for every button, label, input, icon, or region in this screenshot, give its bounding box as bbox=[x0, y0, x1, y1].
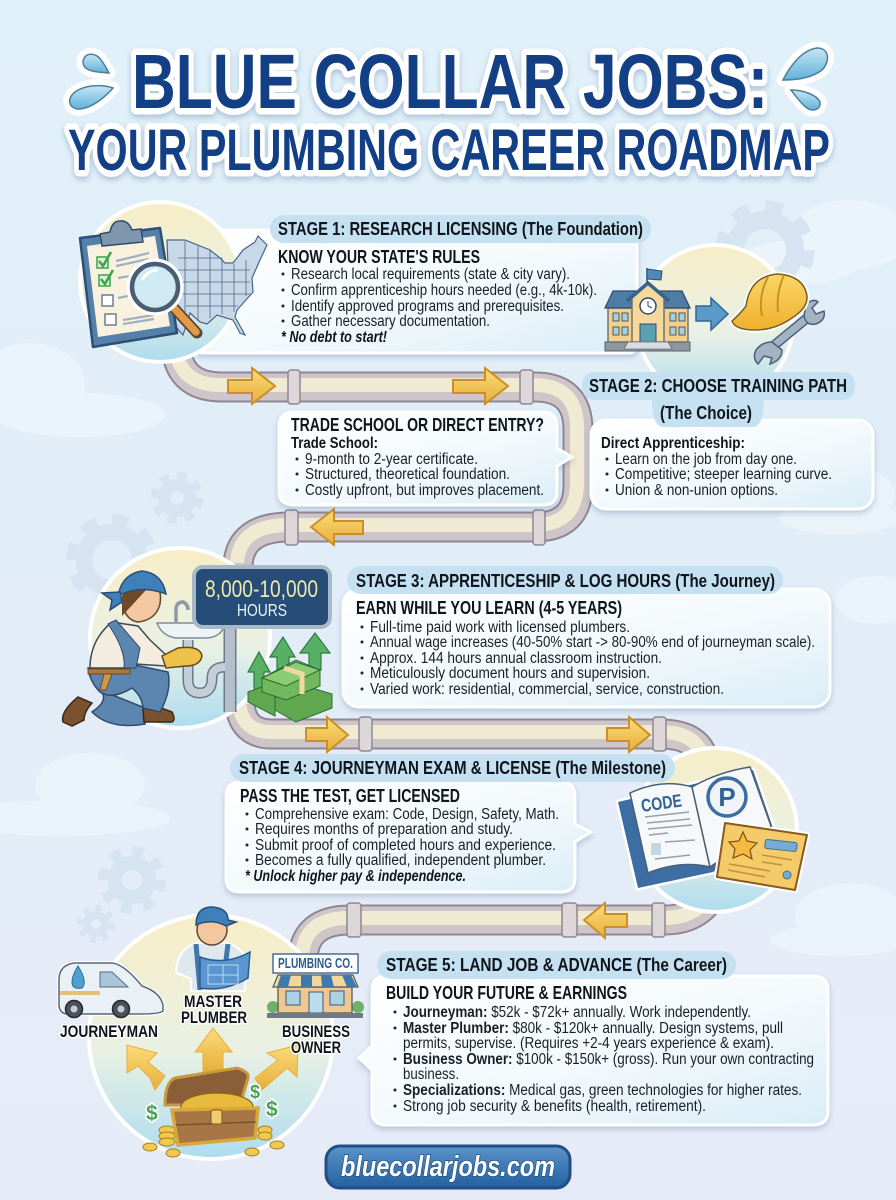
icon: van bbox=[59, 963, 163, 1018]
bubble: stage 4 bbox=[633, 748, 797, 912]
bullet list: Master Plumber: $80k - $120k+ annually. Design systems, pull bbox=[403, 1020, 783, 1037]
icon: treasure chest bbox=[143, 1068, 284, 1157]
stage 2 heading line 1: STAGE 2: CHOOSE TRAINING PATH bbox=[589, 376, 847, 396]
bullet list: Full-time paid work with licensed plumbers. bbox=[370, 619, 630, 636]
bubble: stage 5 bbox=[89, 915, 333, 1159]
label: master plumber: PLUMBER bbox=[181, 1008, 247, 1027]
card heading: KNOW YOUR STATE'S RULES bbox=[278, 247, 480, 267]
icon: sink and drain pipe bbox=[157, 602, 230, 712]
bullet list: Submit proof of completed hours and experience. bbox=[255, 837, 556, 854]
trade school subheading: Trade School: bbox=[291, 435, 378, 452]
icon: master plumber with blueprint bbox=[177, 907, 250, 990]
bullet list: Research local requirements (state & city vary). bbox=[291, 266, 570, 283]
bullet list: Business Owner: $100k - $150k+ (gross). Run your own contracting bbox=[403, 1051, 814, 1068]
card: pass the test bbox=[226, 782, 591, 892]
bubble: stage 2 bbox=[637, 245, 793, 401]
panel: stage 2 bbox=[279, 372, 873, 509]
card: direct apprenticeship bbox=[591, 420, 873, 509]
bullet list: Strong job security & benefits (health, retirement). bbox=[403, 1098, 706, 1115]
stage 5 pill bbox=[377, 951, 736, 979]
bullet list: Approx. 144 hours annual classroom instruction. bbox=[370, 650, 662, 667]
icon: code book bbox=[618, 767, 773, 888]
bullet list: permits, supervise. (Requires +2-4 years experience & exam). bbox=[403, 1035, 774, 1052]
card: earn while you learn bbox=[343, 589, 830, 707]
pipe fittings bbox=[347, 903, 665, 937]
label: business owner: OWNER bbox=[291, 1038, 341, 1057]
label: journeyman: JOURNEYMAN bbox=[60, 1022, 158, 1041]
trade school bullets: Structured, theoretical foundation. bbox=[305, 466, 510, 483]
label: master plumber bbox=[181, 992, 247, 1027]
icon: money and green arrows bbox=[248, 633, 332, 722]
icon: treasure chest: $ bbox=[250, 1082, 260, 1102]
bullet list: * Unlock higher pay & independence. bbox=[245, 868, 466, 885]
stage 4 pill bbox=[230, 754, 675, 782]
bullet list: business. bbox=[403, 1066, 459, 1083]
pipe fittings bbox=[285, 370, 545, 545]
card: build your future bbox=[359, 976, 828, 1125]
card heading: PASS THE TEST, GET LICENSED bbox=[240, 786, 460, 806]
stage 4 heading: STAGE 4: JOURNEYMAN EXAM & LICENSE (The Milestone) bbox=[239, 758, 666, 778]
stage 2 heading line 2: (The Choice) bbox=[660, 403, 752, 423]
arrow: pipe left 3 bbox=[311, 509, 363, 545]
bullet list: Annual wage increases (40-50% start -> 80-90% end of journeyman scale). bbox=[370, 634, 815, 651]
stage 5 heading: STAGE 5: LAND JOB & ADVANCE (The Career) bbox=[386, 955, 727, 975]
arrow: school to hard hat bbox=[696, 298, 728, 330]
trade school bullets bbox=[296, 451, 544, 499]
icon: code book: P bbox=[718, 782, 736, 812]
arrow: pipe left 6 bbox=[584, 903, 627, 938]
icon: US map bbox=[167, 236, 267, 335]
website url: bluecollarjobs.com bbox=[341, 1151, 555, 1183]
card: trade school bbox=[279, 412, 572, 505]
bullet list: Becomes a fully qualified, independent plumber. bbox=[255, 852, 546, 869]
card heading: EARN WHILE YOU LEARN (4-5 YEARS) bbox=[356, 598, 622, 618]
arrow: pipe right 2 bbox=[453, 368, 508, 404]
icon: water drops right bbox=[783, 48, 827, 110]
icon: treasure chest: $ bbox=[266, 1098, 278, 1121]
panel: stage 5 bbox=[359, 951, 828, 1125]
arrow: to business owner bbox=[255, 1045, 298, 1090]
label: business owner: BUSINESS bbox=[282, 1022, 350, 1041]
shop sign text: PLUMBING CO. bbox=[278, 956, 353, 972]
bullet list: Meticulously document hours and supervision. bbox=[370, 665, 650, 682]
panel: stage 1 bbox=[195, 215, 651, 353]
icon: clipboard bbox=[80, 221, 177, 347]
label: business owner bbox=[282, 1022, 350, 1057]
bullet list: Gather necessary documentation. bbox=[291, 313, 490, 330]
bullet list bbox=[245, 806, 559, 885]
arrow: to master plumber bbox=[195, 1028, 232, 1072]
arrow: pipe right 5 bbox=[607, 717, 650, 752]
icon: wrench bbox=[754, 300, 824, 364]
bullet list: Requires months of preparation and study. bbox=[255, 821, 513, 838]
dollar signs: $ bbox=[146, 1102, 158, 1125]
icon: hard hat bbox=[732, 274, 807, 330]
label: master plumber: MASTER bbox=[184, 992, 242, 1011]
pipeline: stage 1 to 3 bbox=[175, 343, 578, 565]
direct apprenticeship bullets: Learn on the job from day one. bbox=[615, 451, 797, 468]
icon: school bbox=[605, 268, 690, 351]
icon: license card bbox=[717, 823, 807, 890]
title bbox=[68, 39, 830, 183]
trade school bullets: Costly upfront, but improves placement. bbox=[305, 482, 544, 499]
direct apprenticeship bullets: Competitive; steeper learning curve. bbox=[615, 466, 832, 483]
card heading: TRADE SCHOOL OR DIRECT ENTRY? bbox=[291, 415, 544, 435]
stage 2 pill bbox=[582, 372, 855, 427]
bullet list bbox=[394, 1004, 814, 1115]
arrow: pipe right 4 bbox=[306, 717, 348, 752]
stage 1 heading: STAGE 1: RESEARCH LICENSING (The Foundation) bbox=[278, 219, 643, 239]
bullet list: Comprehensive exam: Code, Design, Safety, Math. bbox=[255, 806, 559, 823]
icon: water drops left bbox=[70, 54, 113, 109]
pipeline: stage 3 to 4 bbox=[239, 703, 704, 765]
icon: code book: CODE bbox=[640, 790, 683, 816]
arrow: pipe right 1 bbox=[228, 368, 275, 404]
bullet list: Confirm apprenticeship hours needed (e.g., 4k-10k). bbox=[291, 282, 597, 299]
icon: magnifier bbox=[131, 263, 197, 333]
bullet list: Journeyman: $52k - $72k+ annually. Work independently. bbox=[403, 1004, 751, 1021]
icon: plumbing company shop bbox=[267, 954, 364, 1018]
footer badge bbox=[326, 1146, 570, 1188]
card: know your state's rules bbox=[195, 230, 637, 353]
bullet list: Identify approved programs and prerequisites. bbox=[291, 298, 564, 315]
background clouds bbox=[0, 200, 896, 956]
pipeline: stage 4 to 5 bbox=[302, 886, 715, 958]
stage 3 pill bbox=[347, 566, 783, 594]
trade school bullets: 9-month to 2-year certificate. bbox=[305, 451, 478, 468]
direct apprenticeship subheading: Direct Apprenticeship: bbox=[601, 435, 745, 452]
bullet list: Specializations: Medical gas, green technologies for higher rates. bbox=[403, 1082, 802, 1099]
icon: hours sign bbox=[194, 567, 330, 627]
bullet list: Varied work: residential, commercial, service, construction. bbox=[370, 681, 724, 698]
bullet list bbox=[360, 619, 815, 698]
background gears bbox=[72, 207, 808, 940]
stage 3 heading: STAGE 3: APPRENTICESHIP & LOG HOURS (The Journey) bbox=[356, 571, 775, 591]
direct apprenticeship bullets: Union & non-union options. bbox=[615, 482, 778, 499]
bubble: stage 3 bbox=[90, 548, 270, 728]
bubble: stage 1 bbox=[80, 202, 240, 362]
card heading: BUILD YOUR FUTURE & EARNINGS bbox=[386, 983, 627, 1003]
stage 1 pill bbox=[270, 215, 651, 243]
bullet list bbox=[281, 266, 597, 346]
panel: stage 4 bbox=[226, 754, 675, 892]
bullet list: * No debt to start! bbox=[281, 329, 387, 346]
panel: stage 3 bbox=[343, 566, 830, 707]
arrow: to journeyman bbox=[127, 1045, 165, 1090]
hours label: HOURS bbox=[237, 600, 287, 620]
pipe fittings bbox=[359, 717, 666, 751]
hours number: 8,000-10,000 bbox=[205, 576, 318, 603]
icon: plumber kneeling bbox=[63, 571, 202, 726]
direct apprenticeship bullets bbox=[606, 451, 832, 499]
